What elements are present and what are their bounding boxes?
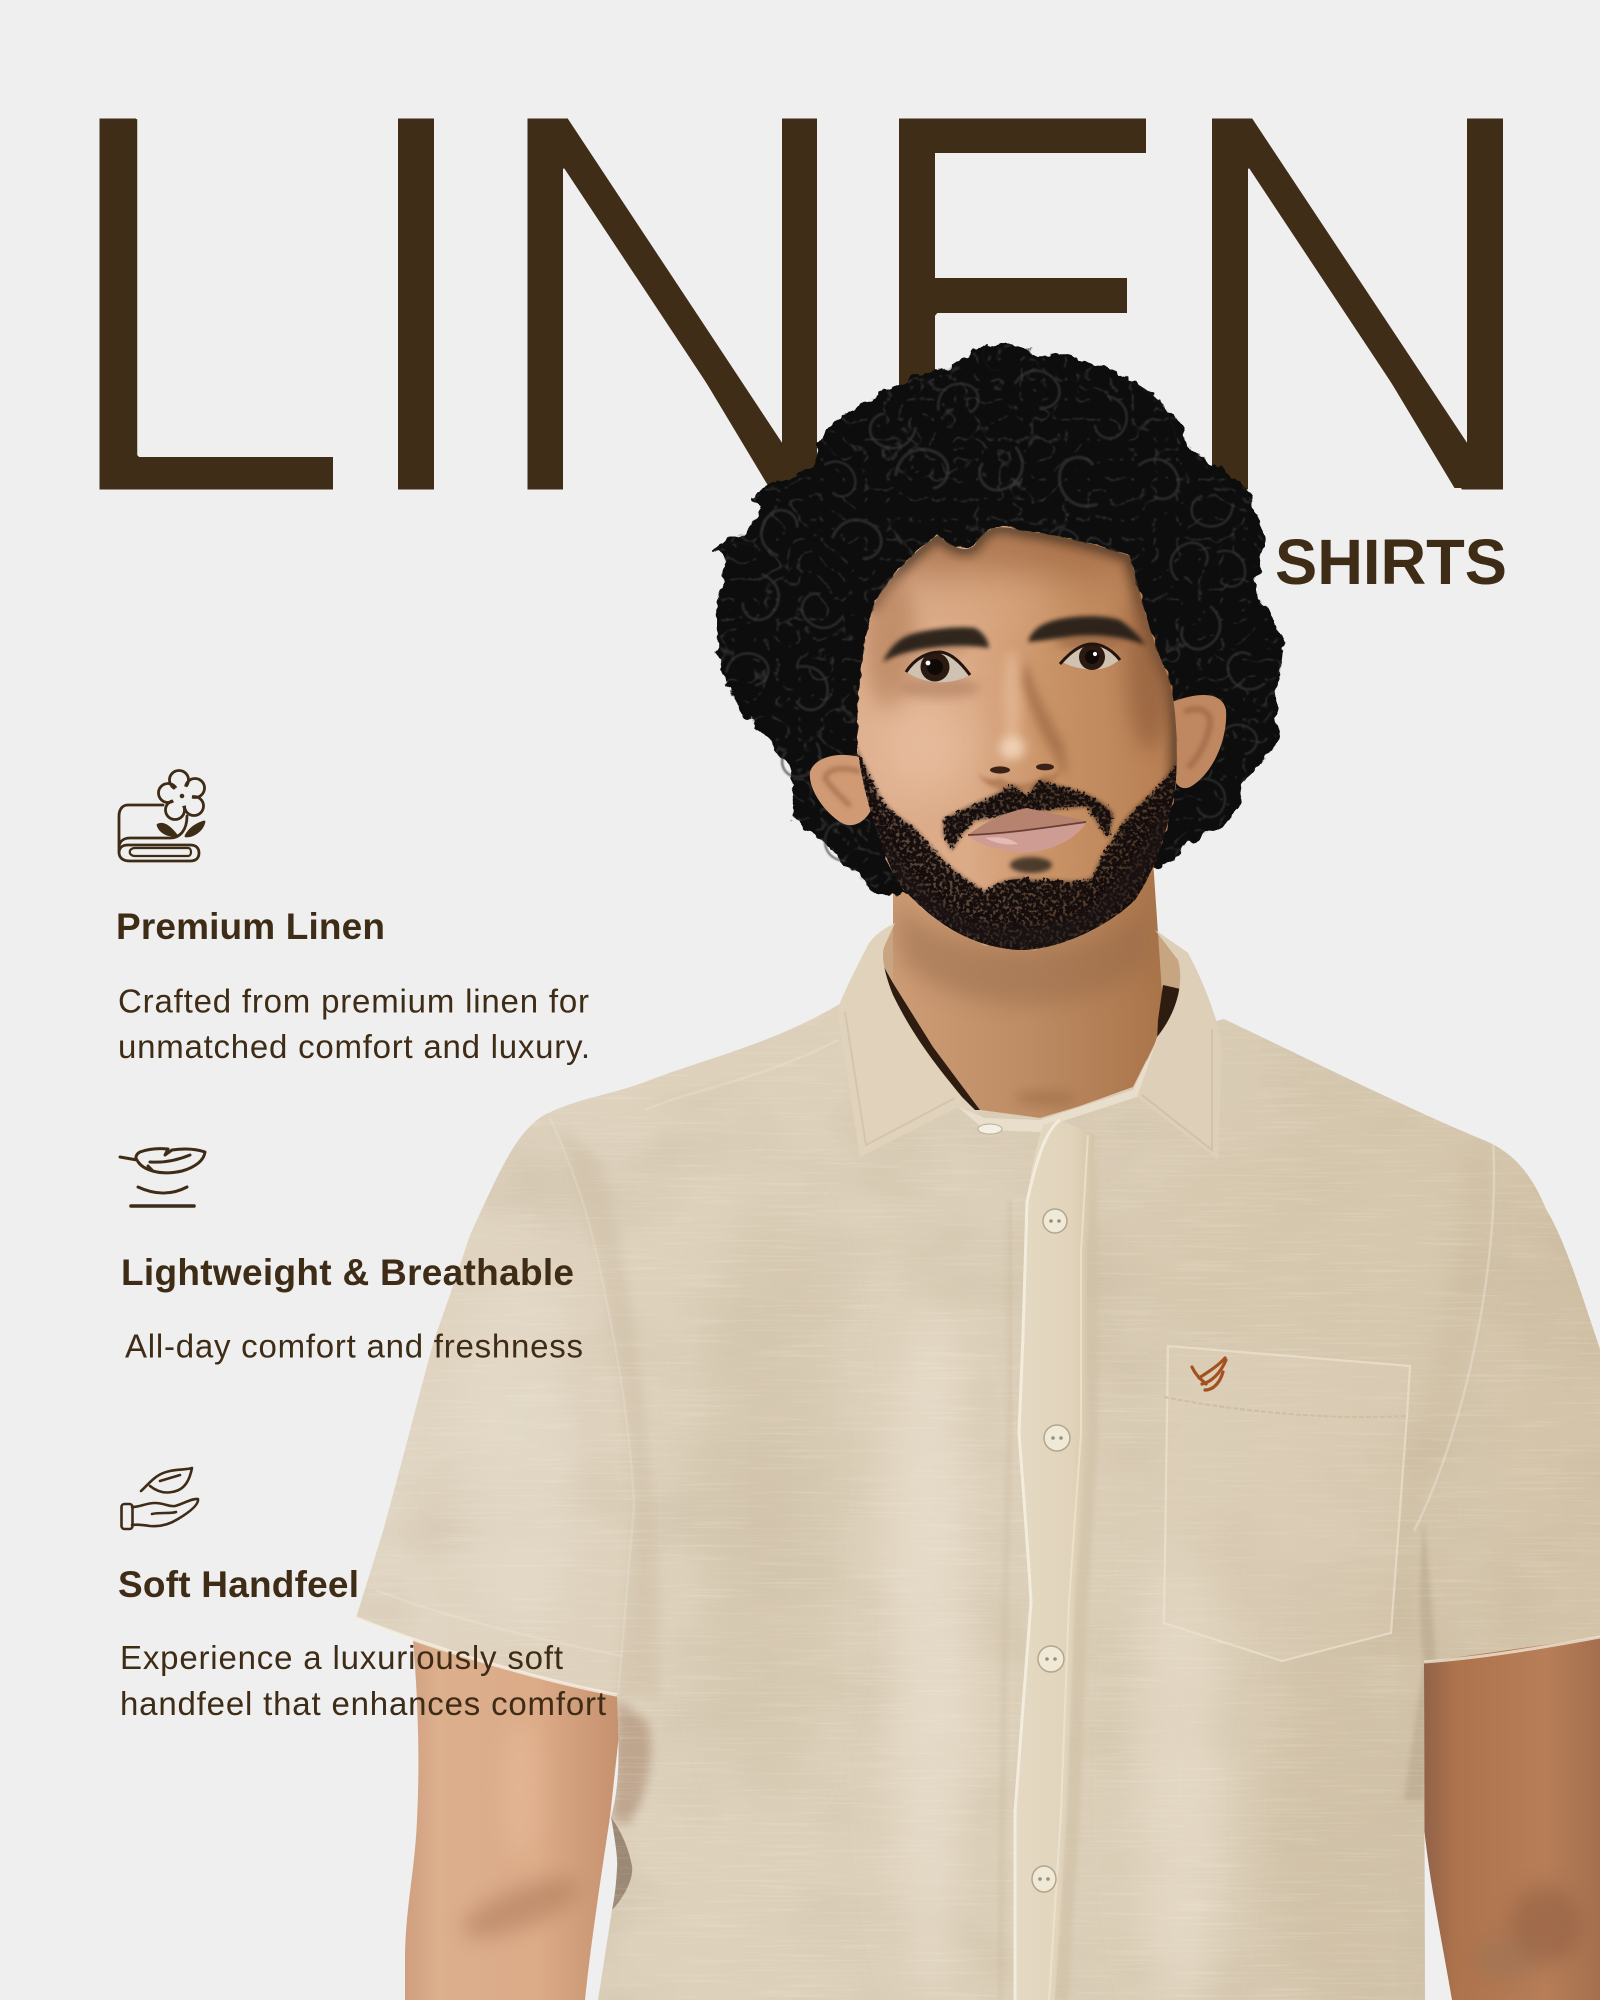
moustache	[944, 781, 1113, 850]
lips	[968, 808, 1088, 835]
shirt body	[340, 990, 1600, 2000]
buttons	[1032, 1209, 1070, 1892]
left ear	[810, 755, 872, 825]
forehead shade	[891, 527, 1136, 596]
icon: towel with flower	[119, 770, 204, 861]
title: LINEN	[48, 0, 1551, 622]
heading: Soft Handfeel	[118, 1564, 359, 1605]
description: handfeel that enhances comfort	[120, 1685, 606, 1722]
hair	[700, 330, 1300, 910]
face	[850, 516, 1185, 960]
icon: feather	[120, 1149, 205, 1206]
left eye	[906, 652, 970, 682]
logo	[1192, 1358, 1226, 1390]
title: LINEN: N	[1163, 0, 1551, 622]
neck	[893, 860, 1163, 1118]
pocket	[1164, 1346, 1410, 1661]
feature: soft handfeel	[118, 1468, 606, 1722]
title: LINEN: L	[48, 0, 359, 618]
placket	[1000, 1120, 1098, 2000]
eye sockets	[900, 678, 980, 698]
left eyebrow	[883, 627, 989, 662]
title: LINEN: I	[343, 0, 487, 618]
description	[118, 982, 590, 1065]
description	[120, 1639, 606, 1722]
description: unmatched comfort and luxury.	[118, 1028, 590, 1065]
nose shadow	[1020, 660, 1068, 780]
left arm	[405, 1600, 625, 2000]
right ear	[1172, 695, 1226, 788]
sleeve seams	[356, 1040, 1600, 1695]
title: LINEN: N	[478, 0, 866, 622]
description: All-day comfort and freshness	[125, 1328, 583, 1364]
beard	[858, 745, 1177, 950]
feature: premium linen	[116, 770, 590, 1065]
right eyebrow	[1028, 616, 1145, 645]
subtitle: SHIRTS: SHIRTS	[1275, 526, 1507, 598]
description: Experience a luxuriously soft	[120, 1639, 563, 1676]
collar	[837, 923, 1222, 1160]
title: LINEN: E	[853, 0, 1179, 618]
collar button	[978, 1124, 1002, 1134]
neck shadow	[880, 900, 1185, 1110]
right arm	[1420, 1625, 1600, 2000]
collar back	[860, 923, 1188, 1070]
icon: hand with leaf	[122, 1468, 198, 1529]
description: Crafted from premium linen for	[118, 982, 589, 1020]
heading: Premium Linen	[116, 906, 385, 947]
right eye	[1060, 644, 1120, 670]
soul patch	[1010, 857, 1052, 873]
model photo	[340, 330, 1600, 2000]
feature: lightweight	[120, 1149, 583, 1364]
heading: Lightweight & Breathable	[121, 1252, 574, 1293]
